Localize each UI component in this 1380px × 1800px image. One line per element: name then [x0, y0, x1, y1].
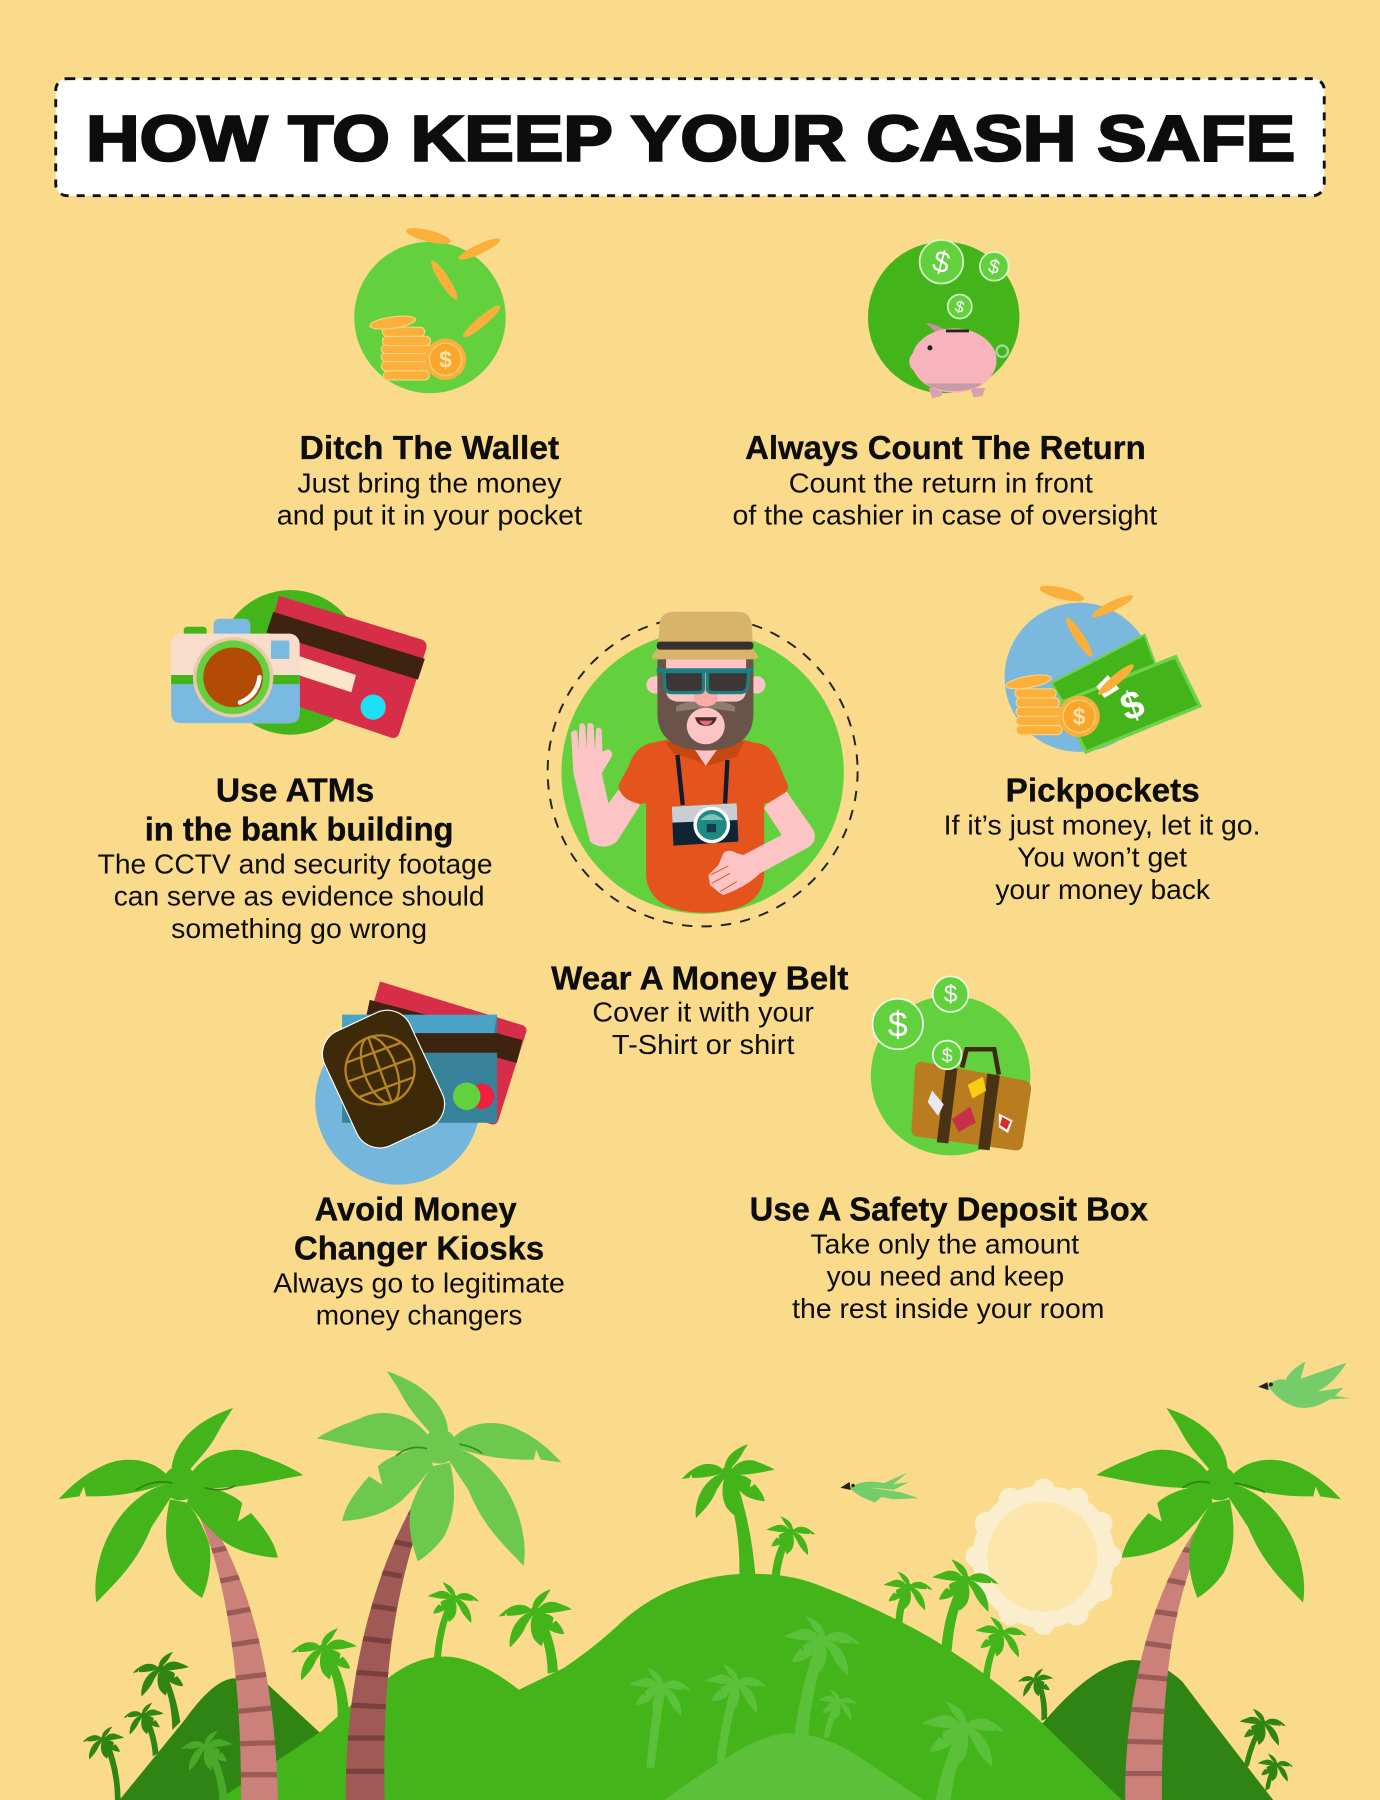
heading: Avoid Money Changer Kiosks: Avoid Money: [315, 1191, 517, 1228]
heading: Use A Safety Deposit Box: Take only the amount: [811, 1229, 1080, 1260]
heading: Ditch The Wallet: and put it in your pocket: [277, 500, 582, 531]
palm on dark hill: [181, 1730, 233, 1800]
icon: suitcase and coins: $: [888, 1005, 908, 1045]
icon: suitcase and coins: $: [944, 981, 958, 1008]
heading: Wear A Money Belt: T-Shirt or shirt: [612, 1029, 795, 1060]
heading: Use ATMs: [98, 772, 493, 944]
icon: falling coins: $: [439, 346, 452, 372]
main green hill: [218, 1574, 1122, 1800]
bird: large: [1258, 1361, 1350, 1408]
ears: [646, 676, 664, 694]
shirt: [618, 740, 788, 913]
icon: falling coins: [354, 225, 506, 393]
icon: piggy bank: $: [929, 244, 954, 281]
heading: Pickpockets: your money back: [995, 874, 1210, 905]
center illustration: tourist: [548, 612, 858, 926]
dark hills: [119, 1660, 1273, 1800]
right large palm: [1096, 1408, 1341, 1800]
mid green palms: [291, 1444, 1027, 1720]
heading: Use A Safety Deposit Box: the rest inside your room: [792, 1293, 1104, 1324]
hat: [658, 612, 753, 643]
icon: camera and credit card: [171, 590, 427, 738]
light green foreground hill: [665, 1733, 923, 1800]
heading: Pickpockets: If it’s just money, let it go.: [944, 810, 1261, 841]
heading: Always Count The Return: Count the return in front: [789, 467, 1093, 498]
bird: small: [840, 1473, 918, 1503]
neck camera: [672, 803, 738, 846]
heading: Wear A Money Belt: Cover it with your: [592, 997, 814, 1028]
heading: Use ATMs: something go wrong: [171, 913, 427, 944]
heading: Use A Safety Deposit Box: Use A Safety Deposit Box: [750, 1191, 1149, 1228]
heading: Pickpockets: You won’t get: [1017, 842, 1187, 873]
right arm and hand: [708, 792, 815, 895]
heading: Use A Safety Deposit Box: you need and keep: [827, 1261, 1064, 1292]
icon: piggy bank: $: [986, 255, 1002, 279]
heading: Use ATMs: The CCTV and security footage: [98, 849, 493, 880]
heading: Pickpockets: [944, 772, 1261, 905]
icon: cash and coins: [1005, 582, 1200, 752]
heading: Always Count The Return: [732, 430, 1158, 531]
sun: [966, 1479, 1122, 1635]
background dark palms: [83, 1652, 1293, 1800]
heading: Pickpockets: Pickpockets: [1006, 772, 1200, 809]
heading: Avoid Money Changer Kiosks: Always go to legitimate: [273, 1268, 565, 1299]
icon: piggy bank: $: [953, 297, 966, 317]
left large palm: [59, 1408, 303, 1800]
title banner: [56, 79, 1324, 196]
icon: suitcase and coins: [871, 976, 1031, 1155]
icon: piggy bank: [868, 240, 1019, 398]
faded palms on hill: [629, 1616, 1005, 1800]
heading: Use A Safety Deposit Box: [750, 1191, 1149, 1324]
heading: Always Count The Return: of the cashier in case of oversight: [732, 500, 1158, 531]
heading: Use ATMs: can serve as evidence should: [114, 881, 485, 912]
icon: cash and coins: $: [1115, 682, 1150, 730]
heading: Use ATMs: Use ATMs: [216, 772, 374, 809]
camera straps: [677, 755, 727, 805]
sunglasses: [657, 668, 753, 693]
icon: suitcase and coins: $: [942, 1045, 953, 1067]
heading: Avoid Money Changer Kiosks: Changer Kiosks: [294, 1230, 544, 1267]
center large palm: [317, 1371, 561, 1800]
beard and face: [657, 659, 753, 751]
heading: Avoid Money Changer Kiosks: money changers: [316, 1300, 522, 1331]
heading: Always Count The Return: Always Count The Return: [745, 430, 1146, 467]
heading: Wear A Money Belt: Wear A Money Belt: [551, 961, 848, 998]
heading: Avoid Money Changer Kiosks: [273, 1191, 565, 1331]
left arm and hand: [571, 723, 640, 847]
title banner: HOW TO KEEP YOUR CASH SAFE: [86, 102, 1295, 175]
heading: Ditch The Wallet: Ditch The Wallet: [300, 430, 559, 467]
icon: passport and cards: [314, 982, 526, 1185]
heading: Ditch The Wallet: [277, 430, 582, 531]
heading: Use ATMs: in the bank building: [145, 811, 454, 848]
heading: Ditch The Wallet: Just bring the money: [297, 467, 562, 498]
heading: Wear A Money Belt: [551, 961, 848, 1060]
icon: cash and coins: $: [1073, 703, 1086, 729]
